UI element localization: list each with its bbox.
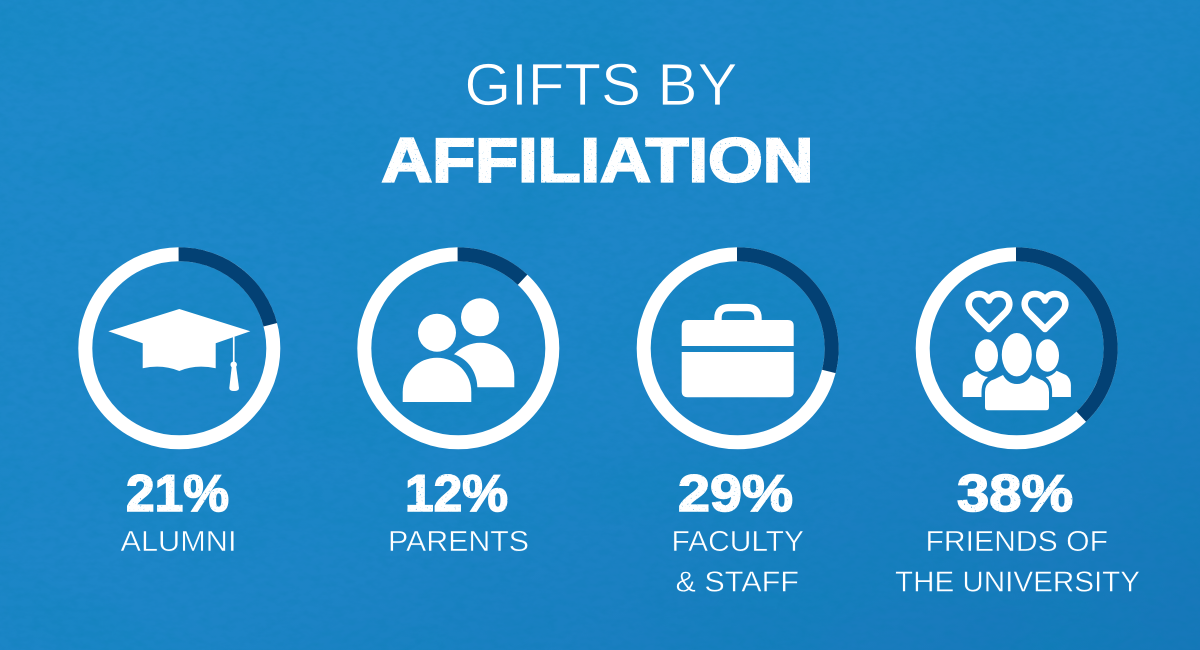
percentage: 21%: 21% [126,465,229,523]
label: parents: PARENTS [388,526,529,558]
icon: briefcase [682,308,794,397]
donut chart: 21% [85,254,273,442]
panel: faculty and staff [644,254,832,599]
icon: two people [403,298,514,402]
label: faculty and staff: & STAFF [676,567,799,599]
panel: alumni [85,254,273,558]
label: faculty and staff: FACULTY [672,526,804,558]
icon: graduation cap [108,309,250,391]
label: friends of the university: FRIENDS OF [926,526,1108,558]
title line: affiliation: AFFILIATION [382,127,814,196]
percentage: 38%: 38% [957,465,1073,523]
donut chart: 29% [644,254,832,442]
title [382,52,814,196]
donut chart: 38% [923,254,1111,442]
label: friends of the university [895,526,1140,599]
title line: gifts by: GIFTS BY [464,52,738,118]
percentage: 12%: 12% [405,465,508,523]
panel: friends of the university [895,254,1140,599]
label: faculty and staff [672,526,804,599]
label: alumni: ALUMNI [120,526,236,558]
donut chart: 12% [364,254,552,442]
icon: group of people with hearts [963,294,1071,410]
percentage: 29%: 29% [678,465,793,523]
label: friends of the university: THE UNIVERSITY [895,567,1140,599]
panel: parents [364,254,552,558]
